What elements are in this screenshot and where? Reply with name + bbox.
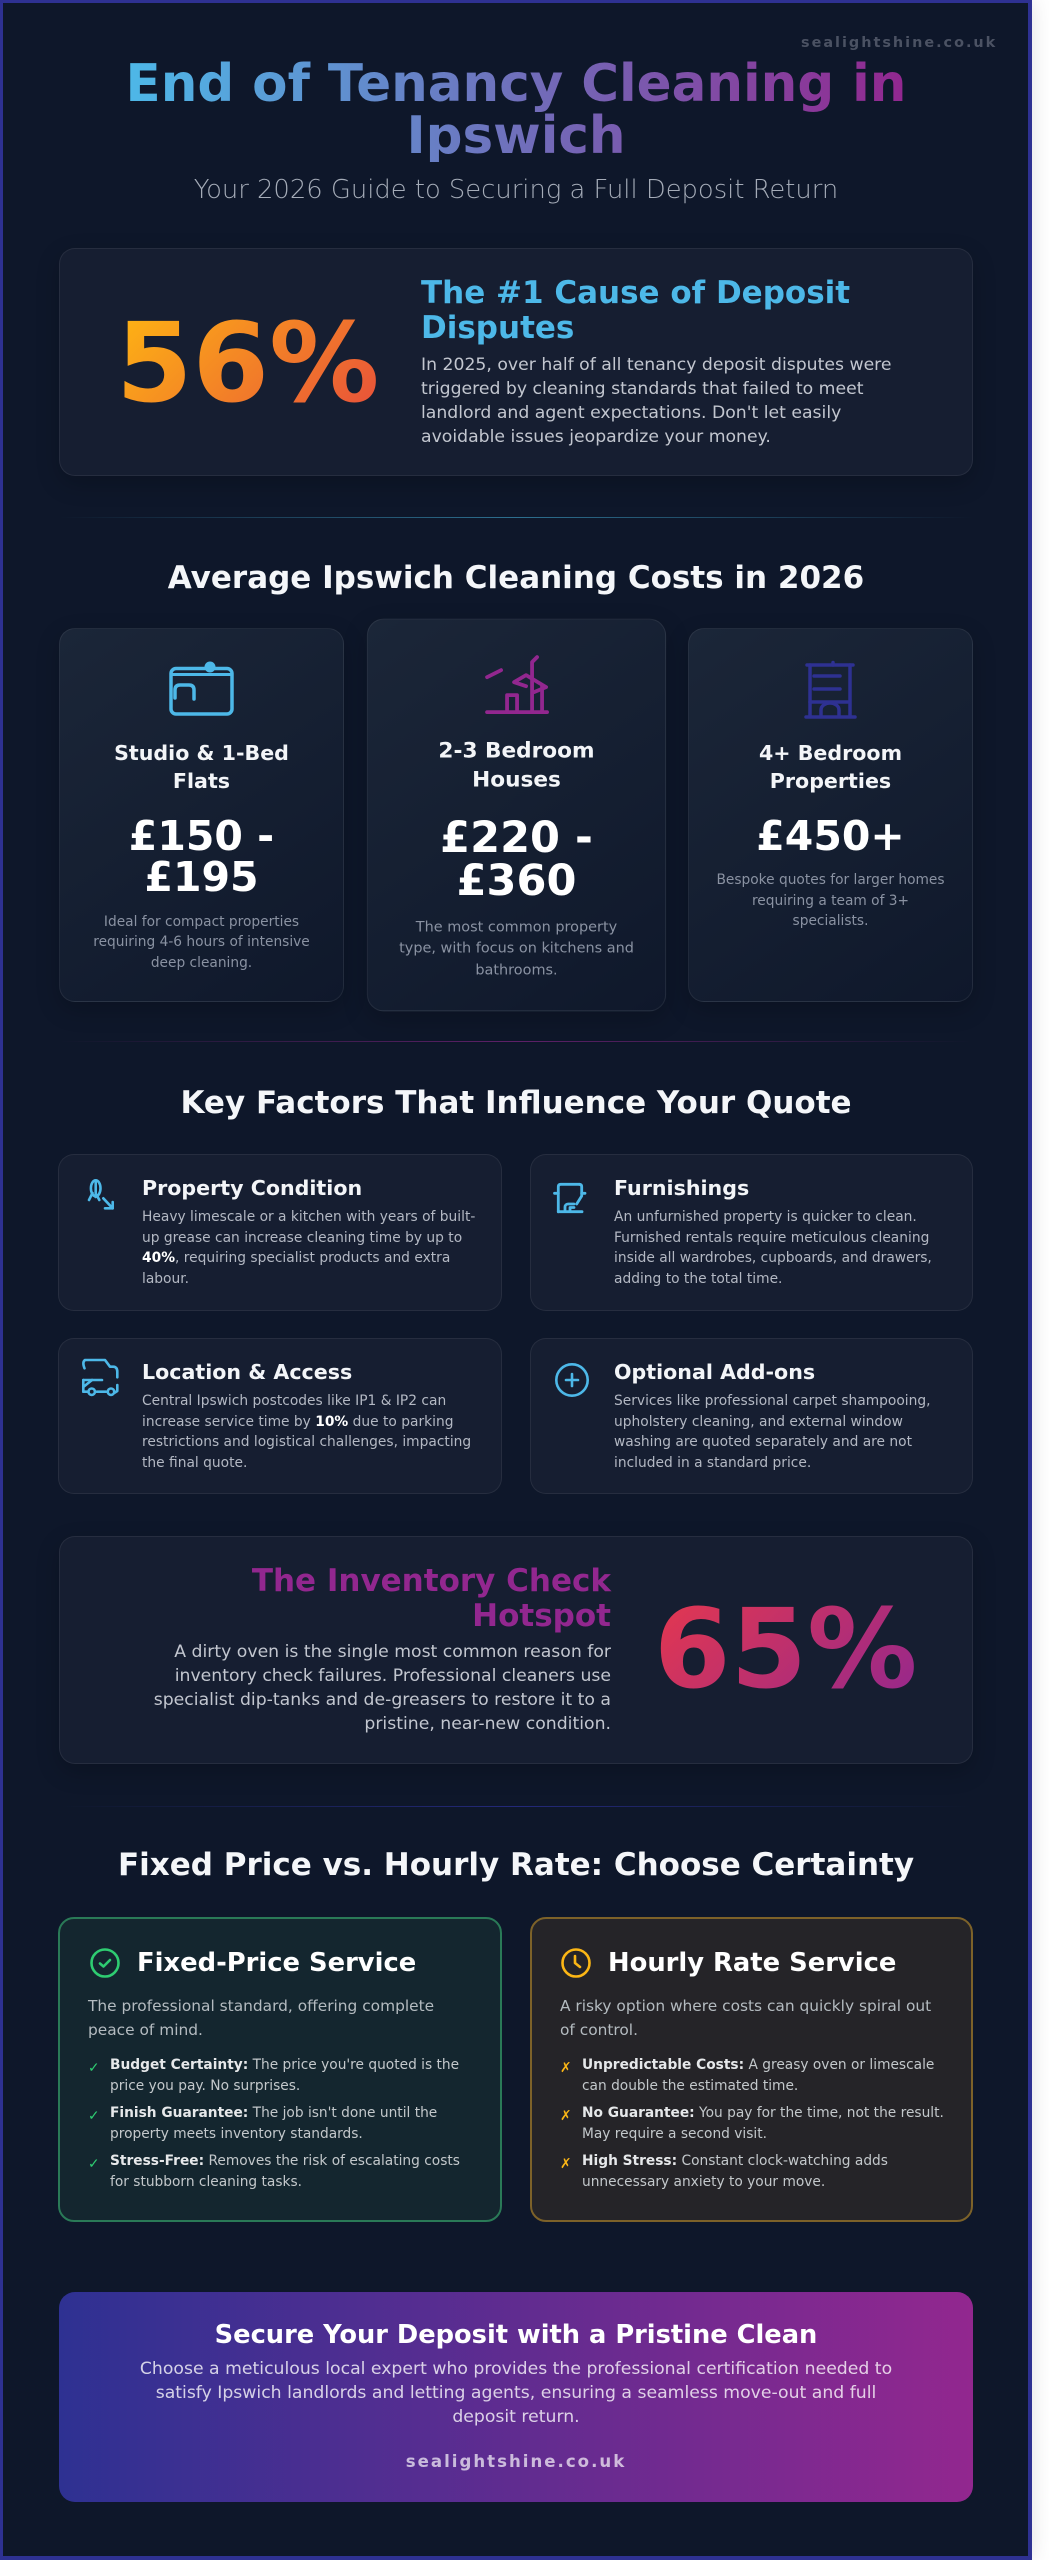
panel: hourly rate service — [530, 1917, 973, 2222]
card description — [716, 872, 945, 929]
card description — [399, 918, 633, 978]
card description: requiring 4-6 hours of intensive — [93, 934, 310, 950]
bullet: Finish Guarantee: The job isn't done until the — [110, 2105, 437, 2121]
factor text: Furnished rentals require meticulous cleaning — [614, 1230, 929, 1246]
factor: furnishings — [530, 1154, 973, 1311]
card description: bathrooms. — [475, 962, 557, 978]
factor text: inside all wardrobes, cupboards, and drawers, — [614, 1250, 932, 1266]
stat description — [154, 1642, 611, 1734]
factor title: Furnishings — [614, 1176, 749, 1200]
bullet — [560, 2057, 934, 2094]
title — [125, 58, 907, 162]
icon: van and route — [82, 1358, 119, 1396]
panel: inventory check stat — [59, 1536, 973, 1764]
card description: deep cleaning. — [151, 955, 252, 971]
CTA text — [140, 2359, 892, 2427]
icon: condition — [88, 1179, 114, 1210]
factor text: up grease can increase cleaning time by up to — [142, 1230, 462, 1246]
section heading: costs: Average Ipswich Cleaning Costs in 2026 — [168, 560, 864, 596]
factor text: 40%, requiring specialist products and extra — [142, 1250, 450, 1266]
CTA text: satisfy Ipswich landlords and letting agents, ensuring a seamless move-out and full — [156, 2383, 876, 2403]
card: larger properties — [688, 628, 973, 1002]
factor text: Central Ipswich postcodes like IP1 & IP2 can — [142, 1393, 446, 1409]
card description: Bespoke quotes for larger homes — [716, 872, 945, 888]
stat description — [421, 355, 892, 447]
card title: Properties — [770, 768, 891, 792]
comparison intro: The professional standard, offering complete — [88, 1997, 434, 2015]
factor text: the final quote. — [142, 1455, 247, 1471]
factor text — [614, 1209, 932, 1287]
card title — [438, 737, 594, 791]
bullet: for stubborn cleaning tasks. — [110, 2174, 302, 2190]
price: £220 - — [440, 812, 592, 862]
panel: deposit disputes stat — [59, 248, 973, 476]
card: houses (featured) — [366, 619, 666, 1011]
bullet: price you pay. No surprises. — [110, 2078, 300, 2094]
stat description: specialist dip-tanks and de-greasers to restore it to a — [154, 1690, 611, 1710]
card description — [93, 914, 310, 971]
stat description: pristine, near-new condition. — [364, 1714, 611, 1734]
watermark: sealightshine.co.uk — [801, 35, 997, 51]
stat heading: Disputes — [421, 310, 574, 346]
factor text: restrictions and logistical challenges, impacting — [142, 1434, 471, 1450]
icon: plus circle — [555, 1363, 589, 1397]
card description: specialists. — [793, 913, 868, 929]
card title: Houses — [472, 766, 560, 791]
stat heading: The Inventory Check — [252, 1563, 611, 1599]
card description: type, with focus on kitchens and — [399, 940, 633, 957]
factor text — [614, 1393, 931, 1471]
bullet: Stress-Free: Removes the risk of escalating costs — [110, 2153, 460, 2169]
card description: The most common property — [415, 918, 617, 935]
bullet — [560, 2105, 944, 2142]
CTA text: deposit return. — [452, 2407, 580, 2427]
card title: Flats — [173, 768, 230, 792]
comparison intro — [560, 1997, 931, 2039]
stat description: inventory check failures. Professional cleaners use — [175, 1666, 611, 1686]
factor title: Optional Add-ons — [614, 1360, 815, 1384]
bullet: unnecessary anxiety to your move. — [582, 2174, 825, 2190]
stat description: avoidable issues jeopardize your money. — [421, 427, 771, 447]
bullet: No Guarantee: You pay for the time, not the result. — [582, 2105, 944, 2121]
section heading: key factors: Key Factors That Influence Your Quote — [180, 1085, 852, 1121]
CTA text: Choose a meticulous local expert who provides the professional certification needed to — [140, 2359, 892, 2379]
card title — [114, 741, 289, 792]
icon: house — [485, 655, 549, 714]
factor: property condition — [58, 1154, 502, 1311]
bullet: ✗ — [560, 2060, 572, 2076]
icon: clock — [561, 1948, 591, 1978]
factor: location — [58, 1338, 502, 1494]
comparison intro: peace of mind. — [88, 2021, 203, 2039]
comparison title: Fixed-Price Service — [137, 1948, 416, 1978]
stat description: A dirty oven is the single most common reason for — [174, 1642, 611, 1662]
bullet list — [560, 2057, 944, 2190]
bullet — [88, 2057, 459, 2094]
factor text: labour. — [142, 1271, 189, 1287]
price: £450+ — [756, 812, 905, 860]
icon: studio — [169, 662, 234, 716]
card title: 4+ Bedroom — [759, 741, 902, 765]
price: £195 — [144, 853, 259, 901]
stat heading: Hotspot — [472, 1598, 611, 1634]
bullet list — [88, 2057, 460, 2190]
stat description: landlord and agent expectations. Don't let easily — [421, 403, 841, 423]
section heading: comparison: Fixed Price vs. Hourly Rate: Choose Certainty — [118, 1847, 914, 1883]
card title — [759, 741, 902, 792]
bullet: May require a second visit. — [582, 2126, 767, 2142]
icon: apartment building — [804, 660, 857, 719]
icon: check circle — [90, 1948, 120, 1978]
stat heading — [421, 275, 850, 346]
title: End of Tenancy Cleaning in — [126, 54, 906, 114]
bullet — [88, 2153, 460, 2190]
bullet: High Stress: Constant clock-watching adds — [582, 2153, 888, 2169]
big stat 56%: 56% — [116, 299, 379, 427]
bullet: ✗ — [560, 2156, 572, 2172]
bullet: ✓ — [88, 2108, 100, 2124]
call to action banner — [59, 2292, 973, 2502]
price: £150 - — [129, 812, 274, 860]
CTA website: sealightshine.co.uk — [406, 2452, 626, 2471]
bullet: Unpredictable Costs: A greasy oven or limescale — [582, 2057, 934, 2073]
comparison intro — [88, 1997, 434, 2039]
factor title: Location & Access — [142, 1360, 352, 1384]
comparison intro: of control. — [560, 2021, 638, 2039]
price — [440, 812, 592, 905]
factor text — [142, 1209, 475, 1287]
stat heading — [252, 1563, 612, 1634]
bullet: ✓ — [88, 2156, 100, 2172]
factor text: Heavy limescale or a kitchen with years of built- — [142, 1209, 475, 1225]
factor text: increase service time by 10% due to parking — [142, 1414, 453, 1430]
subtitle: Your 2026 Guide to Securing a Full Deposit Return — [194, 175, 838, 205]
factor text: Services like professional carpet shampooing, — [614, 1393, 931, 1409]
bullet: ✗ — [560, 2108, 572, 2124]
CTA title: Secure Your Deposit with a Pristine Clean — [215, 2320, 817, 2350]
icon: furnishings — [553, 1182, 586, 1214]
comparison intro: A risky option where costs can quickly spiral out — [560, 1997, 931, 2015]
card description: requiring a team of 3+ — [752, 893, 909, 909]
price — [129, 812, 274, 901]
price: £360 — [456, 855, 576, 905]
title: Ipswich — [406, 106, 626, 166]
card title: 2-3 Bedroom — [438, 737, 594, 762]
bullet: property meets inventory standards. — [110, 2126, 363, 2142]
bullet — [560, 2153, 888, 2190]
bullet: ✓ — [88, 2060, 100, 2076]
stat description: In 2025, over half of all tenancy deposit disputes were — [421, 355, 892, 375]
comparison title: Hourly Rate Service — [608, 1948, 896, 1978]
panel: fixed-price service — [58, 1917, 502, 2222]
card title: Studio & 1-Bed — [114, 741, 289, 765]
stat description: triggered by cleaning standards that failed to meet — [421, 379, 863, 399]
factor text: upholstery cleaning, and external window — [614, 1414, 903, 1430]
bullet — [88, 2105, 437, 2142]
bullet: Budget Certainty: The price you're quoted is the — [110, 2057, 459, 2073]
factor title: Property Condition — [142, 1176, 362, 1200]
big stat 65%: 65% — [654, 1585, 917, 1713]
factor text: included in a standard price. — [614, 1455, 811, 1471]
factor: optional add-ons — [530, 1338, 973, 1494]
factor text: adding to the total time. — [614, 1271, 782, 1287]
factor text: washing are quoted separately and are not — [614, 1434, 912, 1450]
bullet: can double the estimated time. — [582, 2078, 798, 2094]
card description: Ideal for compact properties — [104, 914, 299, 930]
factor text: An unfurnished property is quicker to clean. — [614, 1209, 917, 1225]
card: studio — [59, 628, 344, 1002]
factor text — [142, 1393, 471, 1471]
stat heading: The #1 Cause of Deposit — [421, 275, 850, 311]
